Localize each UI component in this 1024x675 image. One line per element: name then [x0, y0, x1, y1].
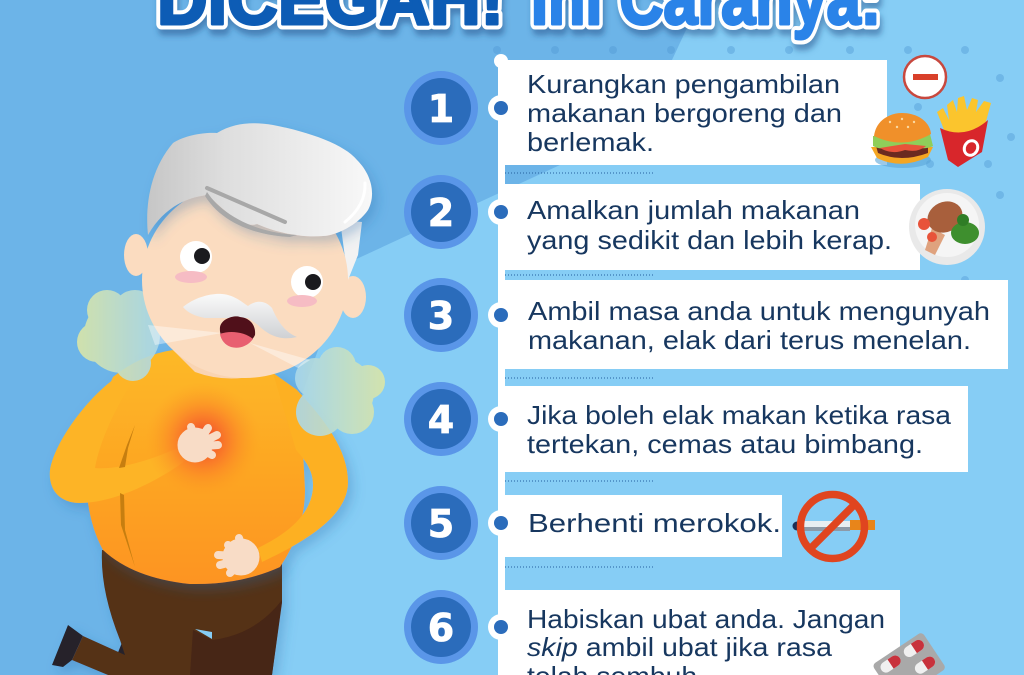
step 4: [404, 382, 968, 472]
icon: no smoking: [792, 494, 875, 558]
divider 2: [505, 274, 655, 276]
number badge 3: [404, 278, 478, 352]
character: old man with heartburn: [50, 123, 385, 675]
divider 5: [505, 566, 655, 568]
right cloud of breath: [295, 347, 385, 436]
number badge 4: 4: [428, 398, 454, 442]
number badge 5: [404, 486, 478, 560]
hand on belly: [218, 538, 259, 575]
number badge 2: 2: [428, 191, 454, 235]
number badge 5: 5: [428, 502, 454, 546]
breath streaks: [148, 325, 310, 368]
text panel 1: berlemak.: [527, 127, 654, 157]
text panel 1: Kurangkan pengambilan: [527, 69, 840, 99]
face: [142, 182, 348, 378]
step 5: [404, 486, 875, 560]
divider 3: [505, 377, 655, 379]
ears: [124, 234, 366, 318]
text panel 3: makanan, elak dari terus menelan.: [528, 325, 971, 355]
trousers and shoe: [52, 550, 282, 675]
text panel 2: yang sedikit dan lebih kerap.: [527, 225, 892, 255]
step 2: [404, 175, 985, 270]
mustache: [183, 294, 297, 338]
tongue: [220, 332, 253, 348]
icon: fries: [937, 96, 991, 167]
number badge 2: [404, 175, 478, 249]
text panel 5: Berhenti merokok.: [528, 508, 781, 538]
text panel 4: tertekan, cemas atau bimbang.: [527, 429, 923, 459]
text panel 5: [488, 495, 782, 557]
hair: [147, 123, 372, 237]
neck: [173, 350, 270, 378]
title: [157, 0, 881, 40]
text panel 6: [488, 590, 900, 675]
step 1: [404, 56, 991, 168]
text panel 1: makanan bergoreng dan: [527, 98, 842, 128]
number badge 4: [404, 382, 478, 456]
shirt folds: [119, 425, 135, 567]
cheeks: [175, 271, 317, 307]
white vertical strip: [494, 54, 508, 675]
chest pain glow: [145, 382, 261, 498]
icon: plate of food: [909, 189, 985, 265]
icon: pill blister: [872, 632, 946, 675]
number badge 1: 1: [428, 87, 454, 131]
eyes: [180, 241, 323, 298]
text panel 6: Habiskan ubat anda. Jangan: [527, 604, 885, 634]
number badge 1: [404, 71, 478, 145]
text panel 3: Ambil masa anda untuk mengunyah: [528, 296, 990, 326]
text panel 3: [488, 280, 1008, 369]
icon: minus: [904, 56, 946, 98]
back hair right: [340, 220, 362, 280]
step 3: [404, 278, 1008, 369]
torso and arms: [50, 350, 348, 584]
text panel 4: Jika boleh elak makan ketika rasa: [527, 400, 952, 430]
divider 1: [505, 172, 655, 174]
mouth: [220, 316, 255, 347]
number badge 6: [404, 590, 478, 664]
left cloud of breath: [77, 290, 160, 381]
text panel 2: [488, 184, 920, 270]
step 6: [404, 590, 946, 675]
text panel 1: [488, 60, 887, 165]
divider 4: [505, 480, 655, 482]
number badge 6: 6: [428, 606, 454, 650]
text panel 4: [488, 386, 968, 472]
text panel 2: Amalkan jumlah makanan: [527, 195, 860, 225]
number badge 3: 3: [428, 294, 454, 338]
text panel 6: skip ambil ubat jika rasa: [527, 632, 833, 662]
icon: burger: [871, 113, 933, 168]
hand on chest: [178, 427, 218, 462]
